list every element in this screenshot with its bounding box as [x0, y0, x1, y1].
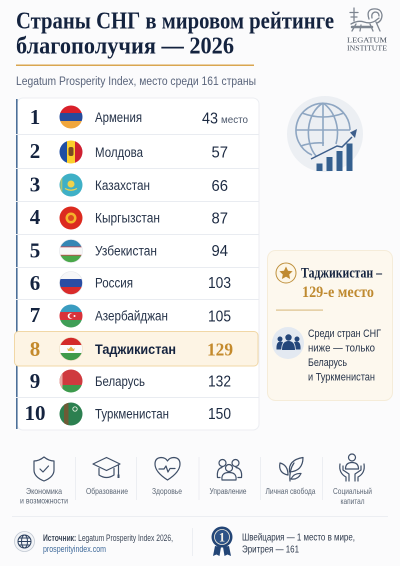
row 4: Кыргызстан: Кыргызстан — [95, 210, 160, 226]
row 2: Молдова: Молдова — [95, 145, 143, 160]
row 2: Молдова: 57 — [212, 144, 228, 162]
row 4: Кыргызстан: 4 — [30, 205, 41, 229]
row 8: Таджикистан (highlight): Таджикистан — [95, 341, 176, 357]
row 1: Армения: место — [221, 115, 248, 126]
row 6: Россия: Россия — [95, 276, 133, 290]
icon: people — [272, 327, 304, 359]
row 8: Таджикистан (highlight): 8 — [30, 337, 40, 361]
title underline — [16, 64, 254, 66]
panel: source — [14, 532, 173, 555]
category: social capital: капитал — [340, 496, 365, 506]
row 6: Россия: 103 — [208, 275, 231, 292]
row 9: Беларусь: 9 — [30, 369, 40, 393]
row 1: Армения: Армения — [95, 110, 142, 125]
icon: globe with rising chart — [287, 96, 363, 172]
category: social capital: Социальный — [333, 486, 372, 496]
category: governance — [210, 460, 247, 496]
panel: source: prosperityindex.com — [43, 544, 106, 555]
category: social capital — [333, 454, 372, 506]
row 3: Казахстан — [30, 172, 228, 197]
category: economy: Экономика — [26, 486, 62, 496]
category: education — [86, 458, 128, 496]
category: economy — [20, 457, 68, 506]
panel: index categories — [12, 454, 388, 516]
row 3: Казахстан: 3 — [30, 172, 40, 196]
callout heading: Таджикистан – — [301, 266, 383, 282]
callout text — [308, 328, 381, 384]
row 5: Узбекистан: 94 — [212, 243, 228, 260]
row 10: Туркменистан — [24, 401, 231, 426]
row 2: Молдова — [30, 139, 228, 164]
subtitle: Legatum Prosperity Index, место среди 161 страны — [16, 76, 256, 88]
callout text: ниже — только — [308, 342, 375, 354]
row 1: Армения: 43 — [202, 110, 218, 128]
note text: Швейцария — 1 место в мире, — [242, 532, 355, 544]
icon: star — [276, 263, 296, 283]
callout text: и Туркменистан — [308, 372, 375, 384]
row 10: Туркменистан: 150 — [208, 406, 231, 423]
callout text: Среди стран СНГ — [308, 328, 381, 340]
logo: Legatum Institute — [347, 8, 387, 52]
panel: ranking table — [14, 98, 259, 430]
icon: medal: 1 — [219, 530, 225, 544]
row 5: Узбекистан — [30, 238, 228, 263]
row 4: Кыргызстан: 87 — [212, 210, 228, 228]
row 5: Узбекистан: 5 — [30, 238, 40, 262]
row 9: Беларусь: Беларусь — [95, 374, 145, 389]
title: Страны СНГ в мировом рейтинге — [16, 8, 334, 34]
category: governance: Управление — [210, 486, 247, 496]
category: health: Здоровье — [152, 486, 182, 496]
row 6: Россия: 6 — [30, 271, 40, 295]
row 7: Азербайджан: 105 — [208, 308, 231, 326]
panel: world extremes note — [212, 526, 355, 556]
row 7: Азербайджан: 7 — [30, 303, 40, 327]
row 8: Таджикистан (highlight): 129 — [207, 340, 233, 360]
panel: Таджикистан callout — [268, 250, 392, 400]
logo: Legatum Institute: INSTITUTE — [347, 44, 387, 52]
row 10: Туркменистан: 10 — [24, 401, 46, 425]
row 2: Молдова: 2 — [30, 139, 40, 163]
icon: medal — [212, 526, 232, 556]
source text: Источник: Legatum Prosperity Index 2026, — [43, 533, 173, 544]
callout heading — [301, 266, 383, 301]
row 1: Армения — [30, 105, 248, 129]
row 7: Азербайджан — [30, 303, 231, 328]
row 9: Беларусь: 132 — [208, 374, 231, 390]
title: благополучия — 2026 — [16, 34, 234, 60]
row 1: Армения: 1 — [30, 105, 40, 129]
row 9: Беларусь — [30, 369, 231, 394]
category: economy: и возможности — [20, 496, 68, 506]
callout heading: 129-е место — [302, 284, 374, 301]
row 6: Россия — [30, 271, 231, 295]
row 8: Таджикистан (highlight) — [14, 332, 258, 366]
row 5: Узбекистан: Узбекистан — [95, 244, 157, 258]
logo: Legatum Institute: LEGATUM — [347, 36, 387, 44]
title — [16, 8, 334, 60]
row 3: Казахстан: Казахстан — [95, 178, 150, 193]
callout text: Беларусь — [308, 357, 347, 369]
icon: globe — [14, 532, 34, 552]
panel: world extremes note: Эритрея — 161 — [242, 544, 299, 556]
category: education: Образование — [86, 486, 128, 496]
category: personal freedom: Личная свобода — [266, 486, 316, 496]
category: personal freedom — [266, 458, 316, 496]
row 3: Казахстан: 66 — [212, 178, 228, 195]
row 4: Кыргызстан — [30, 205, 228, 230]
row 10: Туркменистан: Туркменистан — [95, 406, 169, 422]
row 7: Азербайджан: Азербайджан — [95, 308, 168, 324]
category: health — [152, 458, 182, 496]
